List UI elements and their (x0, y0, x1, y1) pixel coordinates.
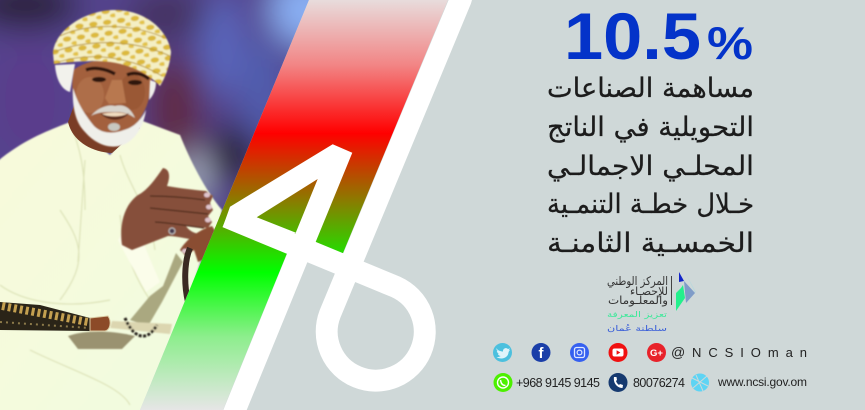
social handle: NCSIOman (692, 345, 807, 360)
logo text: سلطنة عُمان (607, 324, 667, 333)
icon: phone (608, 373, 628, 392)
icon: globe (691, 374, 709, 392)
Arabic statement text: المحلـي الاجمالـي (547, 151, 754, 182)
Arabic statement text: خـلال خطـة التنمـية (547, 189, 754, 220)
ring (169, 228, 175, 234)
belt (0, 302, 110, 331)
logo text: للإحصـاء (630, 285, 668, 298)
photo background blur (0, 0, 360, 260)
headline figure (564, 0, 753, 73)
whatsapp number: +968 9145 9145 (516, 376, 600, 390)
icon: whatsapp (494, 373, 512, 392)
logo text: تعزيز المعرفة (607, 310, 667, 319)
social handle: @ (671, 344, 685, 360)
contact row (494, 373, 807, 392)
Arabic statement text (547, 73, 754, 259)
white hair and turban tail (55, 64, 75, 92)
phone number: 80076274 (633, 376, 685, 390)
Arabic statement text: مساهمة الصناعات (547, 73, 754, 104)
website: www.ncsi.gov.om (717, 375, 807, 389)
logo text: والمعلـومات (608, 294, 668, 307)
icon: facebook (532, 343, 550, 362)
turban (53, 10, 171, 86)
eyes and brows (86, 68, 149, 79)
robe (0, 120, 222, 410)
icon: twitter (493, 343, 512, 362)
headline figure: % (707, 17, 753, 69)
logo mark (676, 272, 696, 311)
logo text (607, 274, 668, 333)
Arabic statement text: الخمسـية الثامنـة (547, 228, 754, 259)
icon: google plus (647, 343, 666, 362)
social icons row (493, 343, 807, 362)
face (72, 58, 152, 147)
icon: google plus: G+ (650, 348, 663, 359)
cane (185, 248, 190, 302)
neck (68, 100, 140, 153)
flag-colour diagonal stripe (140, 0, 448, 410)
hand (121, 168, 216, 262)
icon: facebook: f (538, 345, 544, 362)
icon: youtube (608, 343, 628, 362)
Arabic statement text: التحويلية في الناتج (547, 112, 754, 143)
photo: portrait of the Sultan (0, 0, 309, 410)
logo text: المركز الوطني (607, 274, 668, 289)
nails (204, 193, 210, 197)
icon: instagram (570, 343, 589, 362)
khanjar dagger (68, 253, 183, 349)
beard (73, 88, 146, 147)
headline figure: 10.5 (564, 0, 701, 73)
NCSI logo (607, 272, 696, 333)
emblem: number 46 in white lines (223, 0, 462, 410)
